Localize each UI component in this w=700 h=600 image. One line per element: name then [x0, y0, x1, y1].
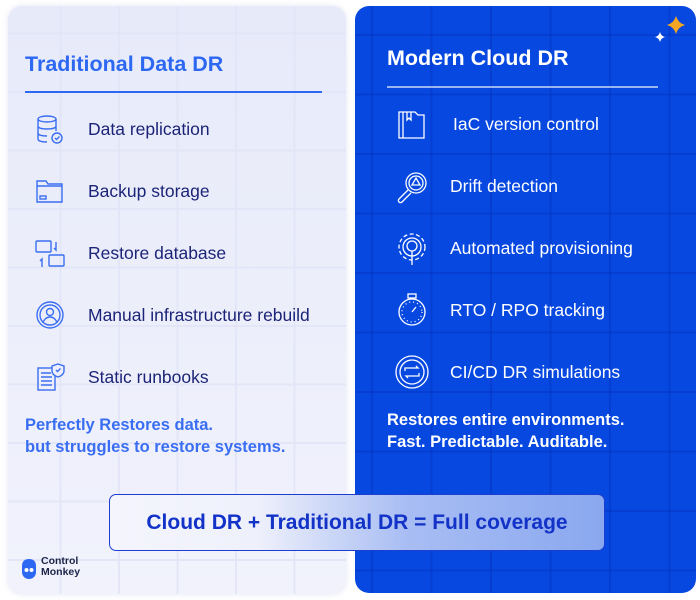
text: left summary: but struggles to restore systems.: [25, 438, 285, 456]
logo: ControlMonkey: Control: [41, 555, 78, 567]
text: right summary: [387, 411, 624, 451]
text: Backup storage: Backup storage: [88, 181, 210, 201]
icon: person: [36, 301, 64, 329]
text: RTO / RPO tracking: RTO / RPO tracking: [450, 300, 605, 320]
icon: cycle: [395, 355, 429, 389]
text: CI/CD DR simulations: CI/CD DR simulations: [450, 362, 620, 382]
text: left summary: [25, 416, 285, 456]
icon: gear: [398, 233, 426, 265]
logo: ControlMonkey: Monkey: [41, 566, 80, 578]
icon: database: [37, 115, 63, 144]
logo: ControlMonkey: [22, 555, 80, 579]
icon: restore database: [35, 240, 65, 267]
heading: Modern Cloud DR: Modern Cloud DR: [387, 46, 569, 70]
icon: magnifier warning: [398, 172, 427, 204]
icon: book: [398, 111, 425, 139]
text: Automated provisioning: Automated provisioning: [450, 238, 633, 258]
text: Static runbooks: Static runbooks: [88, 367, 209, 387]
text: right summary: Fast. Predictable. Auditable.: [387, 433, 607, 451]
text: IaC version control: IaC version control: [453, 114, 599, 134]
icon: runbook: [37, 363, 65, 391]
text: Restore database: Restore database: [88, 243, 226, 263]
panel: modern cloud DR: [355, 6, 696, 593]
banner: full coverage: [109, 494, 605, 551]
sparkles: [655, 16, 685, 42]
text: left summary: Perfectly Restores data.: [25, 416, 213, 434]
text: Drift detection: Drift detection: [450, 176, 558, 196]
text: Manual infrastructure rebuild: Manual infrastructure rebuild: [88, 305, 310, 325]
text: Data replication: Data replication: [88, 119, 210, 139]
text: right summary: Restores entire environments.: [387, 411, 624, 429]
panel: traditional data DR: [8, 6, 346, 594]
banner: full coverage: Cloud DR + Traditional DR = Full coverage: [146, 510, 568, 534]
icon: stopwatch: [398, 293, 426, 326]
icon: folder: [36, 180, 63, 203]
heading: Traditional Data DR: Traditional Data DR: [25, 52, 223, 76]
